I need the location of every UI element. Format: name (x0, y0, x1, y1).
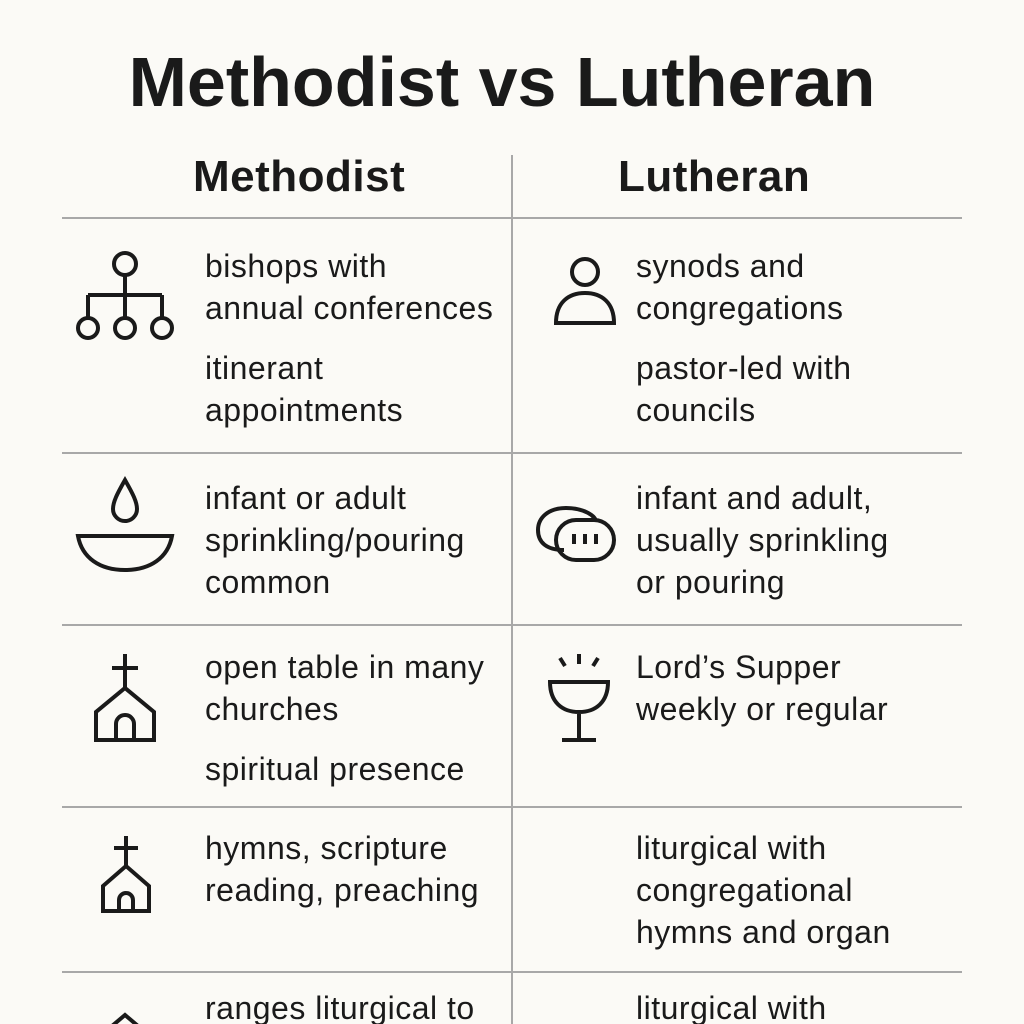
text: communion lutheran: Lord’s Supper (636, 649, 841, 685)
text: polity methodist: bishops with (205, 248, 387, 284)
icon: water basin (76, 476, 174, 572)
text: baptism lutheran: or pouring (636, 564, 785, 600)
text: baptism methodist (205, 480, 465, 600)
icon: small church (101, 836, 151, 913)
text: baptism lutheran: infant and adult, (636, 480, 872, 516)
text: worship lutheran (636, 830, 891, 950)
text: spiritual presence (205, 751, 465, 787)
icon: chalice (548, 654, 610, 742)
text: worship lutheran: hymns and organ (636, 914, 891, 950)
icon: hierarchy (76, 251, 174, 340)
icon: partial roof (111, 1012, 139, 1024)
header: Lutheran: Lutheran (618, 152, 810, 201)
text: pastor-led with (636, 350, 852, 386)
text: polity methodist (205, 248, 493, 326)
text: worship lutheran: congregational (636, 872, 853, 908)
icon: person (554, 257, 616, 325)
text: baptism methodist: sprinkling/pouring (205, 522, 465, 558)
text: communion lutheran: weekly or regular (636, 691, 888, 727)
icon: bread (536, 506, 616, 562)
text: polity methodist: annual conferences (205, 290, 493, 326)
text: councils (636, 392, 756, 428)
text: worship methodist: reading, preaching (205, 872, 479, 908)
text: baptism methodist: infant or adult (205, 480, 406, 516)
text: communion methodist: churches (205, 691, 339, 727)
text: itinerant (205, 350, 323, 386)
text: polity lutheran: synods and (636, 248, 805, 284)
icon: church (94, 654, 156, 742)
text: appointments (205, 392, 403, 428)
text: communion methodist: open table in many (205, 649, 484, 685)
header: Methodist: Methodist (193, 152, 405, 201)
text: worship methodist: hymns, scripture (205, 830, 448, 866)
text: worship lutheran: liturgical with (636, 830, 827, 866)
text: worship methodist (205, 830, 479, 908)
text: communion lutheran (636, 649, 888, 727)
text: baptism lutheran: usually sprinkling (636, 522, 889, 558)
text: polity lutheran (636, 248, 844, 326)
text: baptism lutheran (636, 480, 889, 600)
text: polity lutheran: congregations (636, 290, 844, 326)
text: baptism methodist: common (205, 564, 331, 600)
title: Methodist vs Lutheran (129, 43, 875, 121)
text: communion methodist (205, 649, 484, 727)
